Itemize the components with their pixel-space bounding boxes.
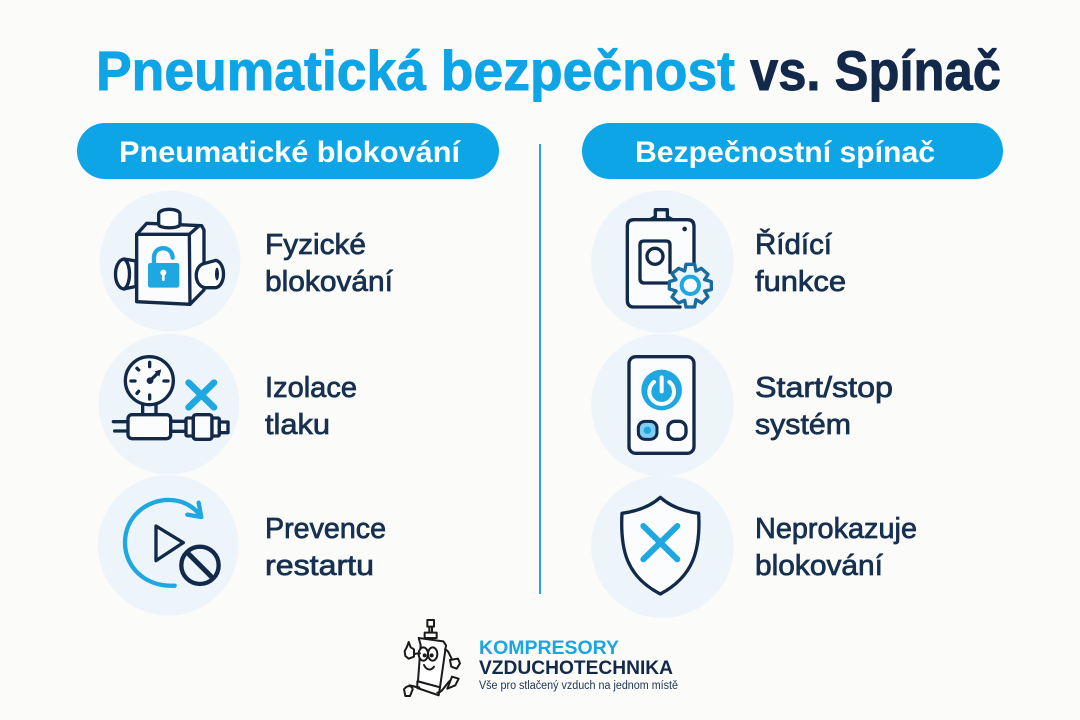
panel heading: Pneumatické blokování: Pneumatické blokování [119,136,462,169]
panel heading: Bezpečnostní spínač: Bezpečnostní spínač [635,136,935,169]
icon: restart arrow with blocked play [98,475,239,616]
icon: pressure gauge with pipe and cross [99,334,239,474]
text: Izolace tlaku [265,372,357,441]
text: Izolace tlaku: Izolace [265,372,357,404]
text: Řídící funkce [755,228,846,298]
text: Neprokazuje blokování: blokování [755,550,883,582]
text: Řídící funkce: funkce [755,266,846,298]
icon: valve with open padlock [100,191,240,331]
panel heading: Pneumatické blokování [77,123,499,179]
text: Fyzické blokování: Fyzické [265,229,366,261]
logo: company name and tagline: KOMPRESORY [479,637,619,659]
text: Izolace tlaku: tlaku [265,409,330,441]
logo: company name and tagline: VZDUCHOTECHNIKA [479,657,673,679]
text: Prevence restartu: Prevence [265,513,386,545]
text: Neprokazuje blokování [755,513,917,582]
icon: control device with gear [591,190,734,333]
title: vs. Spínač [750,39,1001,102]
text: Start/stop systém: Start/stop [755,372,893,404]
text: Řídící funkce: Řídící [755,228,832,261]
text: Prevence restartu: restartu [265,550,374,582]
text: Prevence restartu [265,513,386,582]
text: Start/stop systém [755,372,893,441]
text: Fyzické blokování: blokování [265,266,393,298]
text: Neprokazuje blokování: Neprokazuje [755,513,917,545]
panel heading: Bezpečnostní spínač [582,123,1003,179]
icon: shield with cross [591,475,734,618]
text: Start/stop systém: systém [755,409,851,441]
logo: running cylinder mascot [404,620,460,696]
logo: company name and tagline [479,637,678,692]
logo: company name and tagline: Vše pro stlačený vzduch na jednom místě [479,680,678,692]
text: Fyzické blokování [265,229,393,298]
title: Pneumatická bezpečnost [96,39,735,102]
icon: start/stop control panel [591,334,734,476]
